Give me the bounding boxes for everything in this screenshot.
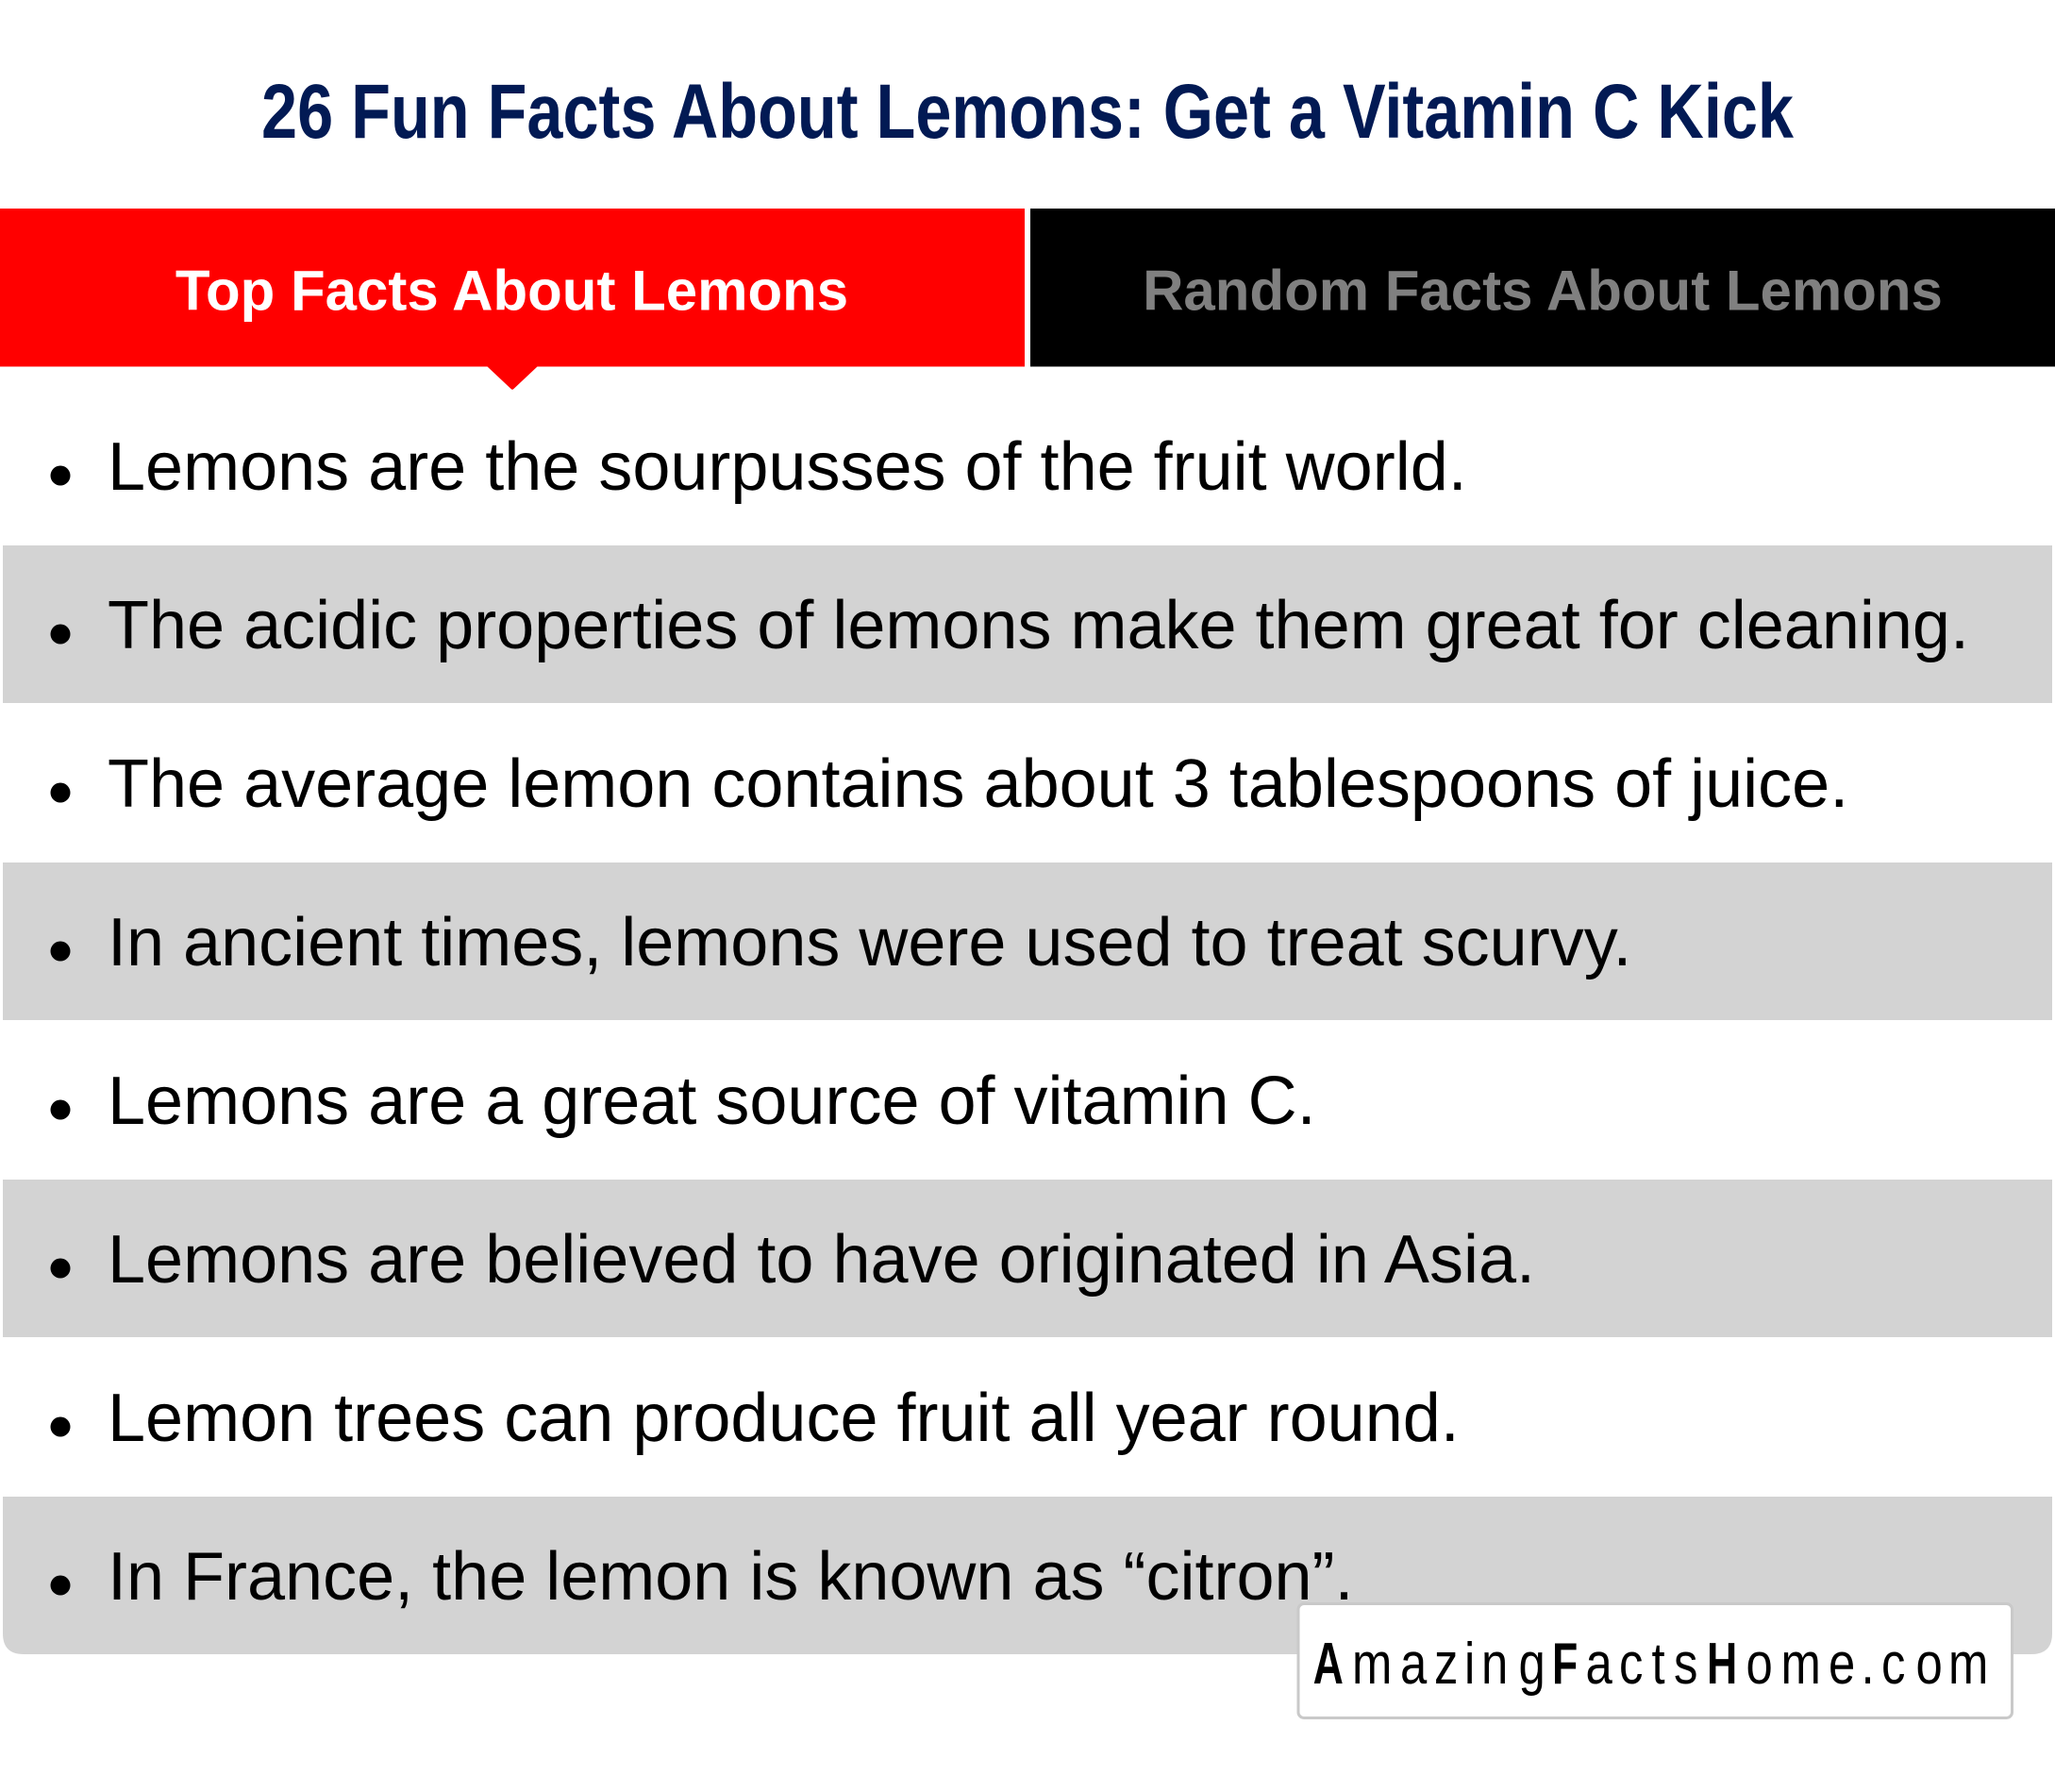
tab heading: top facts: Top Facts About Lemons <box>175 259 848 323</box>
watermark badge: ome.com <box>1746 1632 1988 1697</box>
fact row 4 <box>3 863 2052 1020</box>
fact row 3: The average lemon contains about 3 tablespoons of juice. <box>108 746 1848 822</box>
fact row 5: Lemons are a great source of vitamin C. <box>108 1063 1316 1139</box>
fact row 8: In France, the lemon is known as “citron”. <box>108 1539 1354 1615</box>
tab pointer arrow <box>487 366 538 390</box>
tab: top facts (active) <box>0 209 1025 390</box>
watermark badge: A <box>1313 1632 1344 1697</box>
fact row 8 <box>3 1497 2052 1654</box>
watermark badge: mazing <box>1352 1632 1545 1697</box>
fact row 6: Lemons are believed to have originated in Asia. <box>108 1222 1535 1298</box>
tab: random facts (inactive): Random Facts About Lemons <box>1143 259 1943 323</box>
fact row 2: The acidic properties of lemons make them great for cleaning. <box>108 588 1969 663</box>
title: 26 Fun Facts About Lemons: Get a Vitamin C Kick <box>261 69 1794 155</box>
fact row 2 <box>3 545 2052 703</box>
fact row 4: In ancient times, lemons were used to treat scurvy. <box>108 905 1631 980</box>
fact row 6 <box>3 1180 2052 1337</box>
watermark badge: F <box>1552 1632 1578 1697</box>
watermark badge: acts <box>1586 1632 1697 1697</box>
fact row 7: Lemon trees can produce fruit all year round. <box>108 1381 1460 1456</box>
fact row 1: Lemons are the sourpusses of the fruit world. <box>108 429 1467 505</box>
tab: random facts (inactive) <box>1030 209 2055 366</box>
watermark badge <box>1298 1604 2012 1717</box>
watermark badge: H <box>1707 1632 1737 1697</box>
